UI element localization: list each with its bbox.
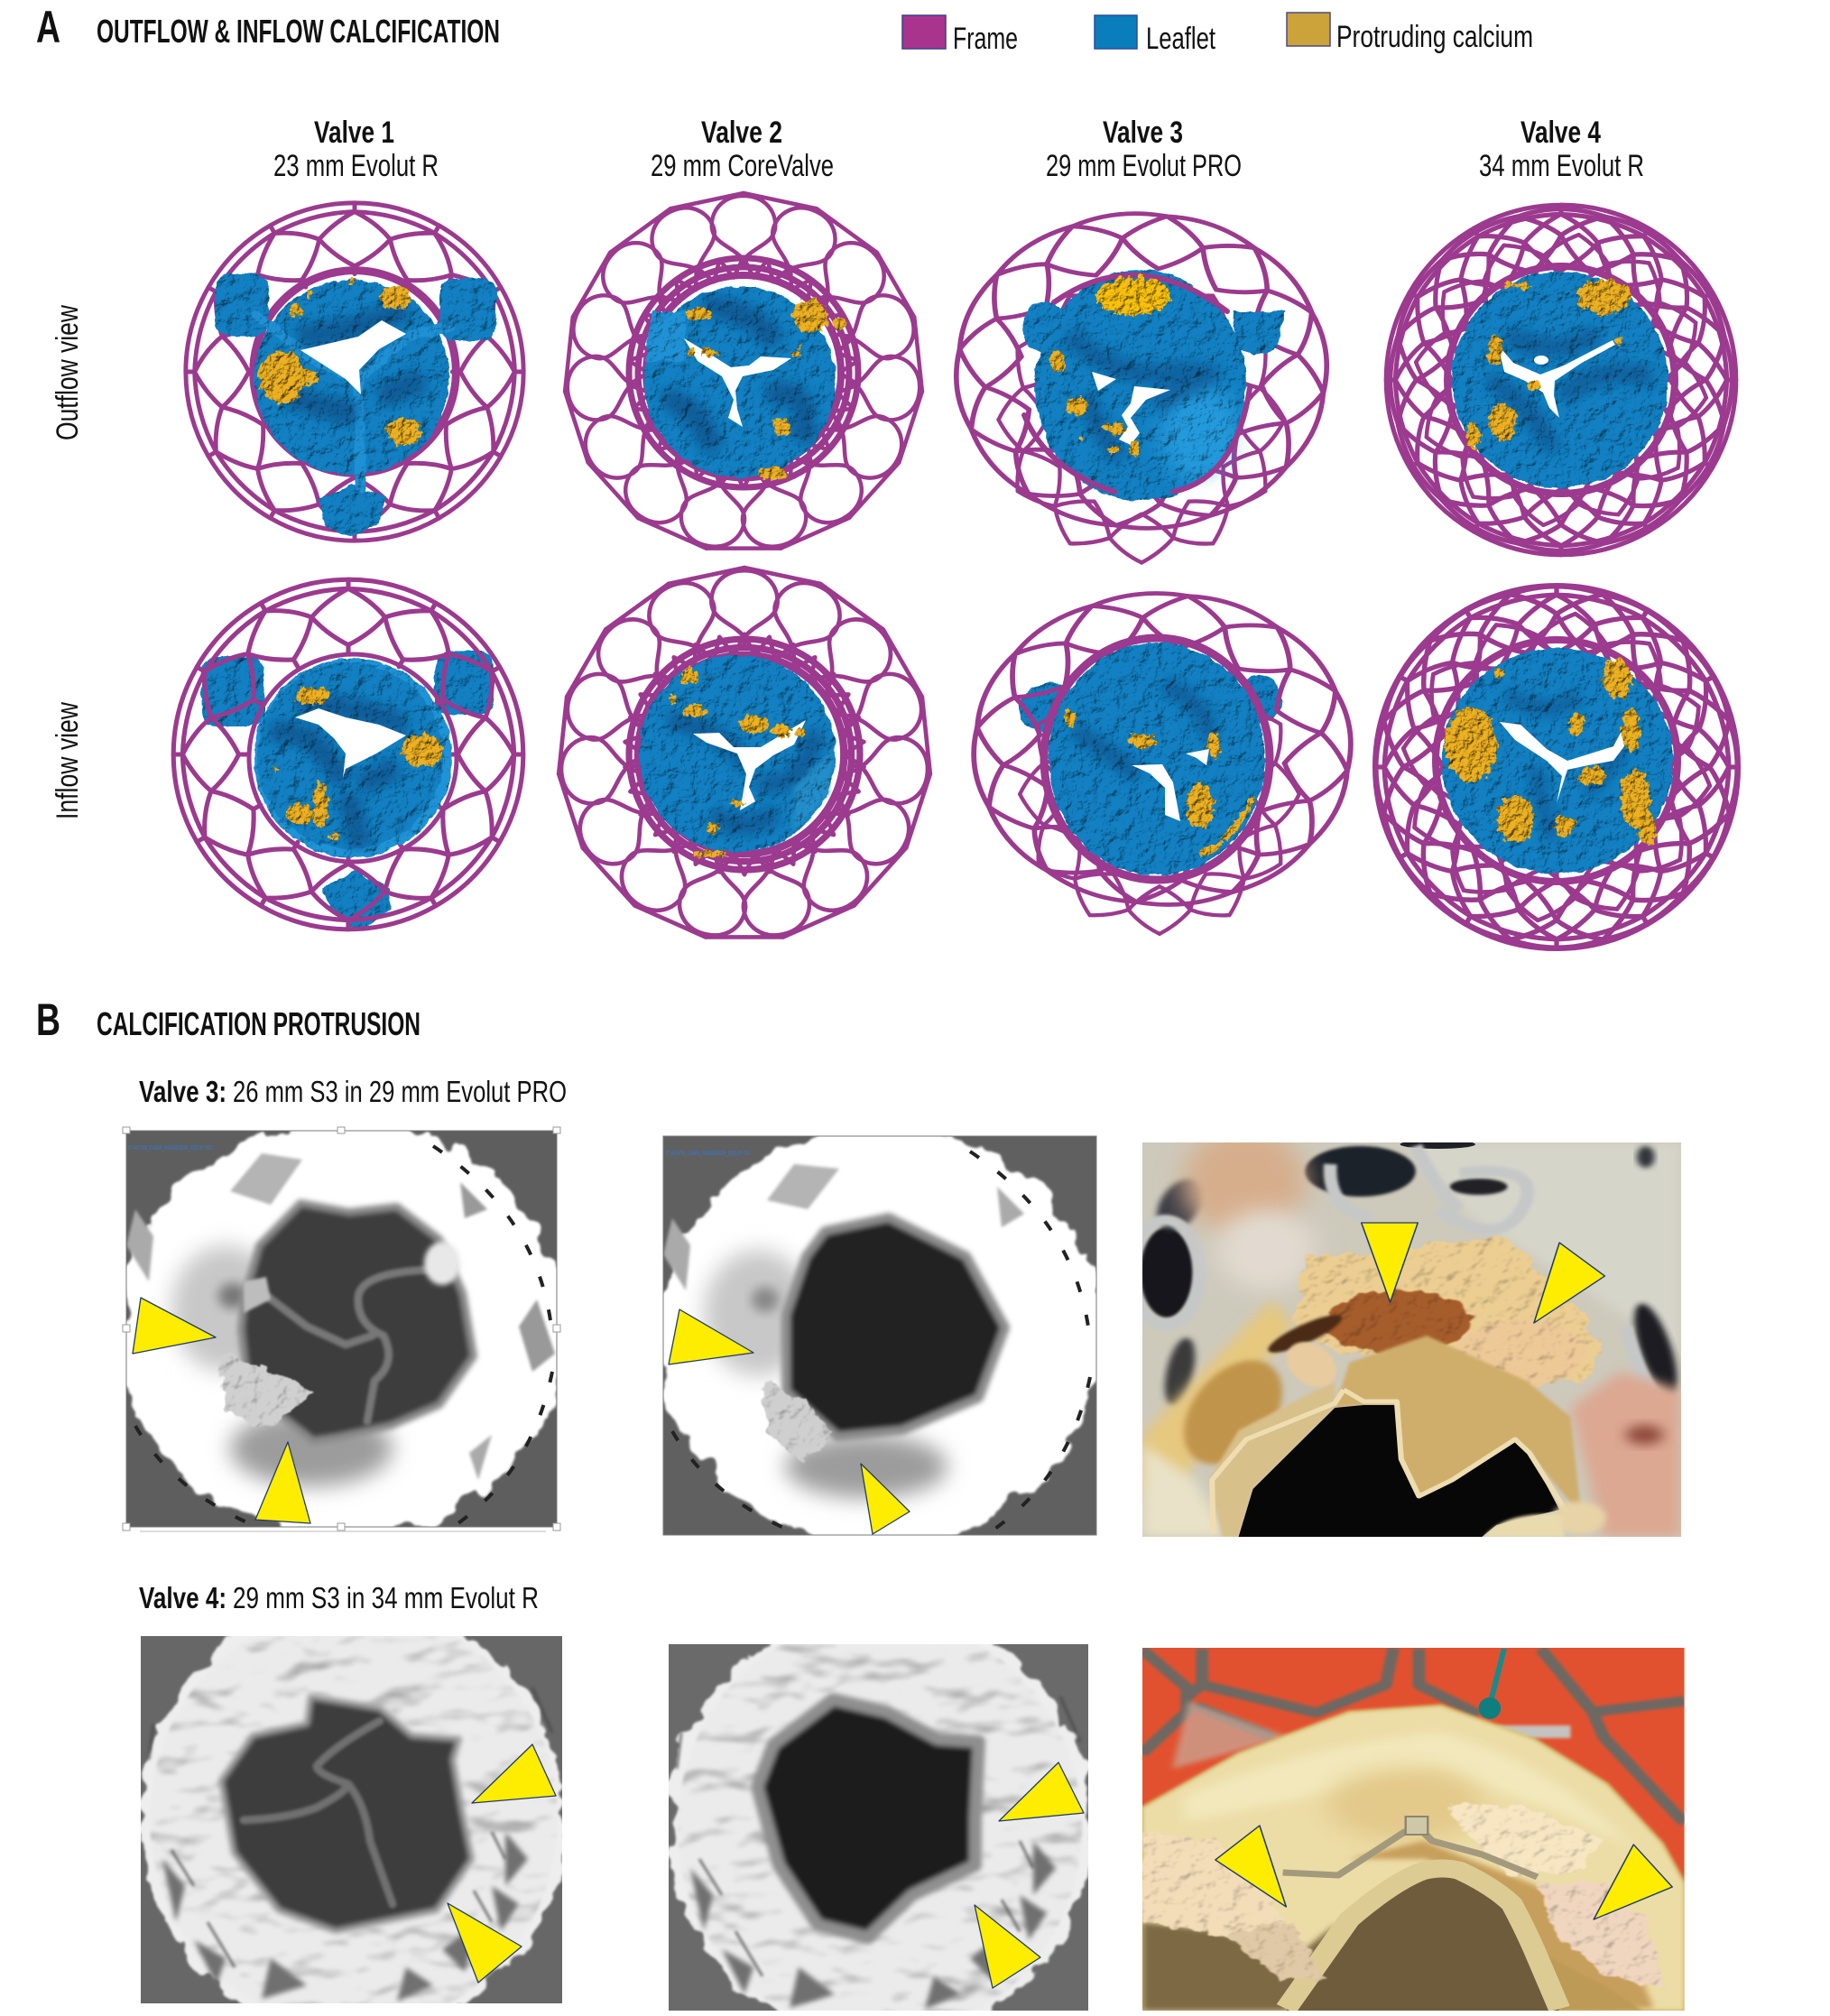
row label: inflow view: Inflow view — [51, 702, 85, 819]
arrowhead — [1594, 1845, 1672, 1919]
heading: outflow and inflow calcification: OUTFLOW & INFLOW CALCIFICATION — [97, 13, 500, 50]
legend item: frame — [902, 15, 1018, 56]
sub-heading: valve 4 — [139, 1581, 539, 1614]
sub-heading: valve 3 — [139, 1075, 567, 1108]
orifice — [693, 720, 806, 810]
valve 3 outflow view — [910, 174, 1373, 579]
arrowhead — [669, 1309, 753, 1364]
leaflet — [1442, 648, 1673, 874]
orifice — [1500, 722, 1624, 803]
protruding calcium — [1465, 280, 1631, 449]
leaflet — [1021, 270, 1286, 501]
arrowhead — [975, 1905, 1040, 1988]
leaflet — [1452, 272, 1668, 488]
orifice — [1498, 340, 1615, 418]
protruding calcium — [273, 688, 443, 840]
panel label: A: A — [36, 2, 60, 52]
sub-heading: valve 4: 29 mm S3 in 34 mm Evolut R — [233, 1581, 539, 1614]
column heading: valve 1: Valve 1 — [314, 116, 394, 150]
column heading: valve 4: 34 mm Evolut R — [1479, 149, 1644, 183]
valve 1 inflow view — [153, 559, 543, 949]
arrowhead — [1215, 1826, 1286, 1907]
sub-heading: valve 3: 26 mm S3 in 29 mm Evolut PRO — [233, 1075, 567, 1108]
arrowhead — [999, 1762, 1084, 1821]
column heading: valve 3: Valve 3 — [1103, 116, 1183, 150]
valve 4 inflow view — [1312, 522, 1801, 1012]
frame — [153, 559, 543, 949]
protruding calcium — [1445, 659, 1656, 844]
panel label: B: B — [36, 994, 60, 1045]
row label: outflow view: Outflow view — [51, 305, 85, 440]
leaflet — [639, 655, 836, 852]
legend item: leaflet — [1095, 15, 1215, 56]
column heading: valve 2: Valve 2 — [701, 116, 782, 150]
valve 4 outflow view — [1330, 149, 1792, 611]
frame — [1330, 149, 1792, 611]
photo: valve 4 high speed frame, leaflets closed — [141, 1636, 562, 2003]
column heading: valve 2 — [651, 116, 834, 183]
photo: valve 4 high speed frame, leaflets open — [669, 1644, 1088, 2011]
frame — [927, 554, 1398, 950]
legend item: protruding calcium: Protruding calcium — [1336, 20, 1533, 54]
orifice — [1132, 749, 1209, 821]
frame — [910, 174, 1373, 579]
inner ring — [249, 654, 457, 862]
arrowhead — [448, 1903, 522, 1983]
arrowhead — [133, 1298, 216, 1354]
arrowhead — [861, 1464, 910, 1534]
sub-heading: valve 4: Valve 4: — [139, 1581, 226, 1614]
legend item: protruding calcium — [1287, 13, 1533, 54]
leaflet — [644, 286, 836, 477]
orifice — [300, 320, 406, 394]
frame overlap over leaflet — [1024, 275, 1250, 492]
orifice — [684, 338, 791, 427]
file name stamp: 37-40-876_CAM3_IMAGE0838_EQUIP-552 — [665, 1151, 751, 1157]
protruding calcium — [685, 299, 846, 480]
column heading: valve 3 — [1046, 116, 1242, 183]
arrowhead — [255, 1442, 310, 1523]
leaflet tabs — [1019, 676, 1282, 734]
valve 3 inflow view — [927, 554, 1398, 950]
file name stamp: 37-40-539_CAM3_IMAGE0830_EQUIP-552 — [127, 1145, 213, 1151]
column heading: valve 1 — [273, 116, 439, 183]
valve 2 outflow view — [551, 179, 937, 563]
heading: calcification protrusion: CALCIFICATION PROTRUSION — [97, 1005, 421, 1042]
column heading: valve 1: 23 mm Evolut R — [273, 149, 439, 183]
orifice — [295, 708, 406, 778]
photo: valve 4 gross specimen — [1142, 1648, 1685, 2011]
column heading: valve 2: 29 mm CoreValve — [651, 149, 834, 183]
orifice — [1092, 372, 1170, 445]
column heading: valve 3: 29 mm Evolut PRO — [1046, 149, 1242, 183]
column heading: valve 4 — [1479, 116, 1644, 183]
leaflet tabs — [201, 652, 494, 931]
photo: valve 3 high speed frame, leaflets open — [658, 1126, 1102, 1545]
photo: valve 3 gross specimen — [1132, 1128, 1686, 1537]
protruding calcium — [667, 668, 805, 856]
protruding calcium — [1049, 277, 1170, 456]
legend item: frame: Frame — [953, 22, 1018, 56]
sub-heading: valve 3: Valve 3: — [139, 1075, 226, 1108]
frame — [1312, 522, 1801, 1012]
frame — [166, 183, 543, 560]
valve 1 outflow view — [166, 183, 543, 560]
frame — [551, 179, 937, 563]
protruding calcium — [258, 278, 421, 446]
photo: valve 3 high speed frame, leaflets closed — [121, 1119, 565, 1538]
leaflet — [1049, 643, 1265, 875]
legend — [902, 13, 1533, 56]
arrowhead — [1534, 1243, 1604, 1323]
leaflet — [215, 273, 496, 537]
frame — [545, 553, 946, 953]
legend item: leaflet: Leaflet — [1146, 22, 1215, 56]
valve 2 inflow view — [545, 553, 946, 953]
arrowhead — [472, 1744, 556, 1803]
leaflet — [254, 659, 452, 857]
protruding calcium — [1065, 707, 1256, 859]
column heading: valve 4: Valve 4 — [1520, 116, 1601, 150]
arrowhead — [1362, 1223, 1418, 1302]
